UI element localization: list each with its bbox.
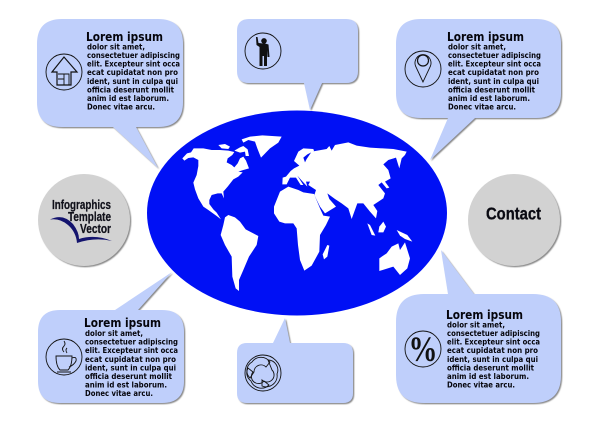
- icon: house: [46, 54, 82, 90]
- text: bottom left: ecat cupidatat non pro: [85, 355, 177, 364]
- text: bottom left: ident, sunt in culpa qui: [85, 363, 176, 372]
- speech bubble: bottom middle: [237, 318, 353, 403]
- icon: person: [245, 33, 281, 69]
- text: bottom left: officia deserunt mollit: [85, 372, 172, 381]
- text: bottom right: elit. Excepteur sint occa: [447, 338, 540, 347]
- logo swoosh: [50, 217, 112, 243]
- text: bottom left: dolor sit amet,: [85, 329, 143, 338]
- logo text: Infographics: [52, 197, 111, 212]
- text: bottom right: ecat cupidatat non pro: [447, 346, 539, 355]
- text: top left: Donec vitae arcu.: [87, 103, 155, 112]
- text: bottom left: elit. Excepteur sint occa: [85, 346, 178, 355]
- speech bubble: top right: [396, 19, 561, 160]
- text: bottom right: Lorem ipsum: [446, 307, 523, 322]
- speech bubble: bottom right: [396, 250, 561, 403]
- icon: swirl: [245, 355, 281, 391]
- text: bottom left: Donec vitae arcu.: [85, 389, 153, 398]
- text: bottom right: consectetuer adipiscing: [447, 329, 540, 338]
- text: top left: anim id est laborum.: [87, 94, 169, 103]
- text: bottom left: Lorem ipsum: [84, 315, 161, 330]
- text: top right: officia deserunt mollit: [448, 85, 535, 94]
- contact circle: [468, 174, 560, 266]
- text: top left: ecat cupidatat non pro: [87, 68, 179, 77]
- text: bottom right: [446, 307, 540, 390]
- text: bottom right: dolor sit amet,: [447, 320, 505, 330]
- logo text: [52, 197, 111, 236]
- speech bubble: bottom left: [38, 272, 184, 403]
- text: bottom left: consectetuer adipiscing: [85, 338, 178, 347]
- text: top left: consectetuer adipiscing: [87, 51, 180, 60]
- text: top left: dolor sit amet,: [87, 42, 145, 52]
- logo text: Vector: [80, 221, 111, 236]
- icon: coffee cup: [46, 339, 82, 375]
- speech bubble: top left: [37, 19, 183, 168]
- blue oval: [147, 110, 447, 316]
- text: top right: anim id est laborum.: [448, 94, 530, 103]
- text: top left: Lorem ipsum: [86, 29, 163, 44]
- logo circle: [38, 174, 130, 266]
- text: top right: consectetuer adipiscing: [448, 51, 541, 60]
- text: top right: Donec vitae arcu.: [448, 103, 516, 112]
- text: top right: Lorem ipsum: [447, 29, 524, 44]
- text: bottom right: anim id est laborum.: [447, 372, 529, 381]
- text: top right: ecat cupidatat non pro: [448, 68, 540, 77]
- eurasia: [282, 142, 407, 219]
- icon: percent: %: [408, 329, 438, 369]
- text: bottom right: ident, sunt in culpa qui: [447, 355, 538, 364]
- africa and oceania: [274, 187, 412, 275]
- logo text: Template: [68, 209, 111, 224]
- text: top left: officia deserunt mollit: [87, 85, 174, 94]
- world map: [147, 110, 447, 316]
- text: bottom left: anim id est laborum.: [85, 381, 167, 390]
- contact label: Contact: [486, 204, 541, 224]
- text: top left: elit. Excepteur sint occa: [87, 60, 180, 69]
- text: bottom left: [84, 315, 178, 398]
- text: top left: [86, 29, 180, 112]
- text: top right: dolor sit amet,: [448, 42, 506, 52]
- text: top right: elit. Excepteur sint occa: [448, 60, 541, 69]
- text: top right: [447, 29, 541, 112]
- icon: map pin: [405, 51, 441, 87]
- text: bottom right: Donec vitae arcu.: [447, 381, 515, 390]
- speech bubble: top middle: [237, 19, 358, 110]
- text: top right: ident, sunt in culpa qui: [448, 77, 539, 86]
- text: top left: ident, sunt in culpa qui: [87, 77, 178, 86]
- text: bottom right: officia deserunt mollit: [447, 363, 534, 372]
- americas: [182, 135, 282, 291]
